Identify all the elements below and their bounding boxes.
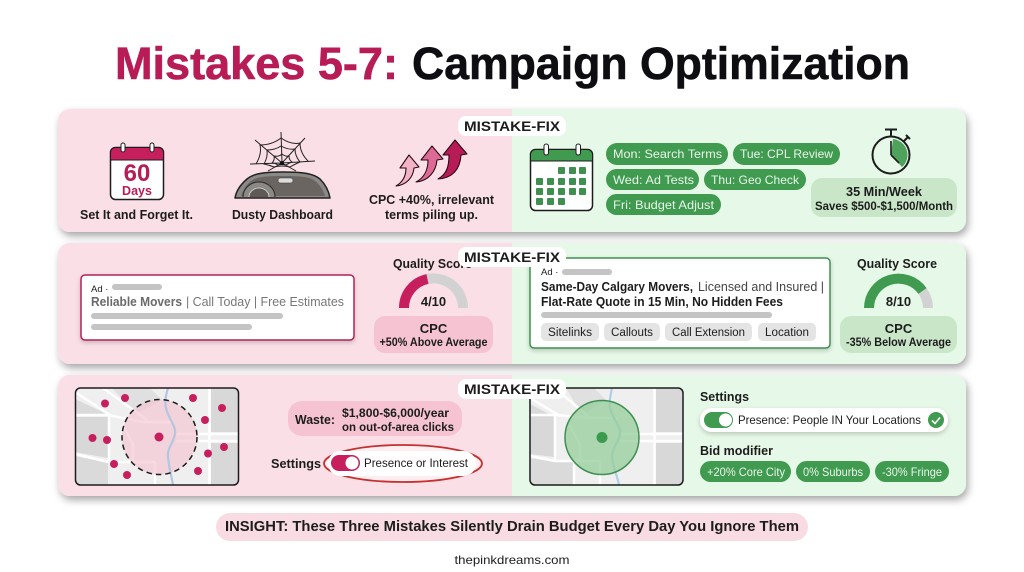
toggle: presence or interest: Presence or Interest: [364, 458, 469, 470]
title: Campaign Optimization: [412, 38, 910, 89]
label: bid modifier: Bid modifier: [700, 443, 773, 458]
callout: time and savings: 35 Min/Week: [846, 184, 923, 199]
heading: quality score low: Quality Score: [393, 257, 472, 271]
strong ad card: Licensed and Insured |: [698, 280, 824, 294]
icon: 60 days calendar: 60: [124, 160, 150, 187]
callout: waste amount: Waste:: [295, 412, 335, 427]
bid modifier pills: -30% Fringe: [882, 465, 942, 479]
schedule pills: Thu: Geo Check: [711, 173, 800, 187]
strong ad card: Ad ·: [541, 267, 558, 278]
strong ad card: Callouts: [611, 327, 653, 339]
icon: stopwatch: [872, 129, 910, 174]
map: focused target area: [530, 388, 683, 485]
text: cpc increase: CPC +40%, irrelevant: [369, 193, 495, 207]
label: settings right: Settings: [700, 389, 749, 404]
schedule pills: Wed: Ad Tests: [613, 173, 694, 187]
strong ad card: Same-Day Calgary Movers,: [541, 280, 693, 294]
toggle: presence or interest: [324, 445, 482, 482]
panel: row 2 ad quality: [58, 243, 966, 364]
weak ad card: | Call Today | Free Estimates: [186, 295, 344, 309]
badge: mistake-fix row 2: [458, 247, 566, 267]
weak ad card: Reliable Movers: [91, 295, 182, 309]
bid modifier pills: [700, 461, 949, 482]
schedule pills: Mon: Search Terms: [613, 147, 722, 161]
text: dusty dashboard: Dusty Dashboard: [232, 208, 333, 222]
panel: row 1 set it and forget it: [58, 109, 966, 232]
callout: time and savings: Saves $500-$1,500/Month: [815, 201, 953, 213]
icon: 60 days calendar: Days: [122, 184, 152, 198]
schedule pills: Fri: Budget Adjust: [613, 198, 715, 212]
panel: row 3 location targeting: [58, 375, 966, 496]
footer: thepinkdreams.com: [454, 553, 570, 567]
callout: time and savings: [811, 178, 957, 217]
title: [115, 38, 910, 89]
icon: dusty dashboard with cobweb: [235, 132, 330, 198]
bid modifier pills: +20% Core City: [707, 465, 785, 479]
title: Mistakes 5-7:: [115, 38, 398, 89]
gauge: 4 of 10: 4/10: [421, 294, 446, 309]
map: scattered clicks: [75, 388, 239, 485]
gauge: 8 of 10: 8/10: [886, 294, 911, 309]
badge: mistake-fix row 1: MISTAKE-FIX: [464, 118, 561, 134]
badge: mistake-fix row 2: MISTAKE-FIX: [464, 249, 561, 265]
badge: mistake-fix row 3: [458, 379, 566, 399]
text: terms piling up: terms piling up.: [385, 208, 478, 222]
toggle: presence: Presence: People IN Your Locations: [738, 413, 921, 427]
heading: quality score high: Quality Score: [857, 257, 937, 271]
badge: mistake-fix row 3: MISTAKE-FIX: [464, 381, 561, 397]
gauge: 8 of 10: [869, 279, 928, 309]
callout: cpc above average: +50% Above Average: [380, 337, 488, 349]
strong ad card: [530, 258, 830, 348]
callout: cpc below average: -35% Below Average: [846, 337, 951, 349]
callout: waste amount: [288, 401, 462, 436]
gauge: 4 of 10: [404, 278, 463, 309]
callout: cpc above average: CPC: [420, 321, 448, 336]
callout: waste amount: on out-of-area clicks: [342, 420, 454, 434]
schedule pills: [606, 143, 840, 215]
label: settings wrong: Settings: [271, 456, 321, 471]
icon: rising cpc arrows: [396, 140, 467, 186]
callout: cpc below average: CPC: [885, 321, 913, 336]
weak ad card: [81, 275, 354, 340]
strong ad card: Flat-Rate Quote in 15 Min, No Hidden Fees: [541, 295, 783, 309]
toggle: presence: [700, 408, 948, 432]
weak ad card: Ad ·: [91, 284, 108, 295]
strong ad card: Sitelinks: [548, 327, 592, 339]
strong ad card: Call Extension: [672, 327, 745, 339]
schedule pills: Tue: CPL Review: [740, 147, 833, 161]
icon: weekly calendar: [530, 144, 592, 210]
text: set it and forget it: Set It and Forget It.: [80, 208, 193, 222]
callout: waste amount: $1,800-$6,000/year: [342, 406, 449, 420]
insight banner: INSIGHT: These Three Mistakes Silently Drain Budget Every Day You Ignore Them: [225, 519, 799, 535]
callout: cpc above average: [374, 316, 493, 353]
icon: 60 days calendar: [110, 143, 164, 200]
badge: mistake-fix row 1: [458, 116, 566, 136]
insight banner: [216, 513, 808, 541]
bid modifier pills: 0% Suburbs: [803, 465, 863, 479]
callout: cpc below average: [840, 316, 957, 353]
strong ad card: Location: [765, 327, 809, 339]
